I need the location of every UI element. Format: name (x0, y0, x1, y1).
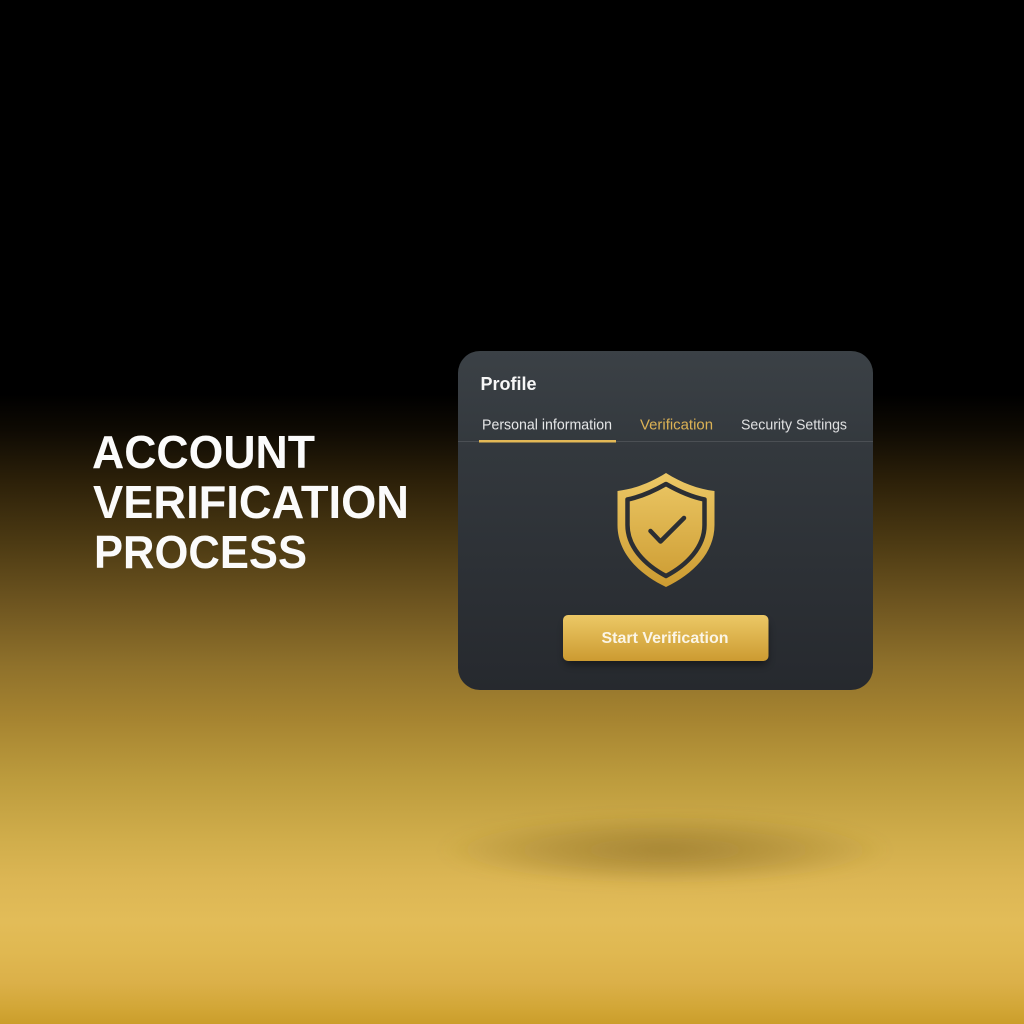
title: PROCESS (94, 526, 307, 578)
card heading: Profile (480, 374, 536, 394)
title: ACCOUNT (92, 426, 315, 478)
title: VERIFICATION (93, 476, 409, 528)
floating card ground shadow (440, 814, 890, 886)
card background (458, 351, 873, 690)
button: start verification (563, 615, 768, 661)
icon: shield with checkmark (618, 473, 714, 587)
tabs: Verification (640, 418, 713, 434)
tab divider (458, 441, 873, 442)
title (92, 426, 409, 578)
tabs: Security Settings (741, 418, 847, 434)
tabs: Personal information (482, 418, 612, 434)
panel: profile card (458, 351, 873, 690)
button: start verification: Start Verification (602, 630, 728, 647)
active tab underline (479, 440, 616, 442)
tabs (482, 418, 847, 434)
button shadow (565, 621, 768, 665)
